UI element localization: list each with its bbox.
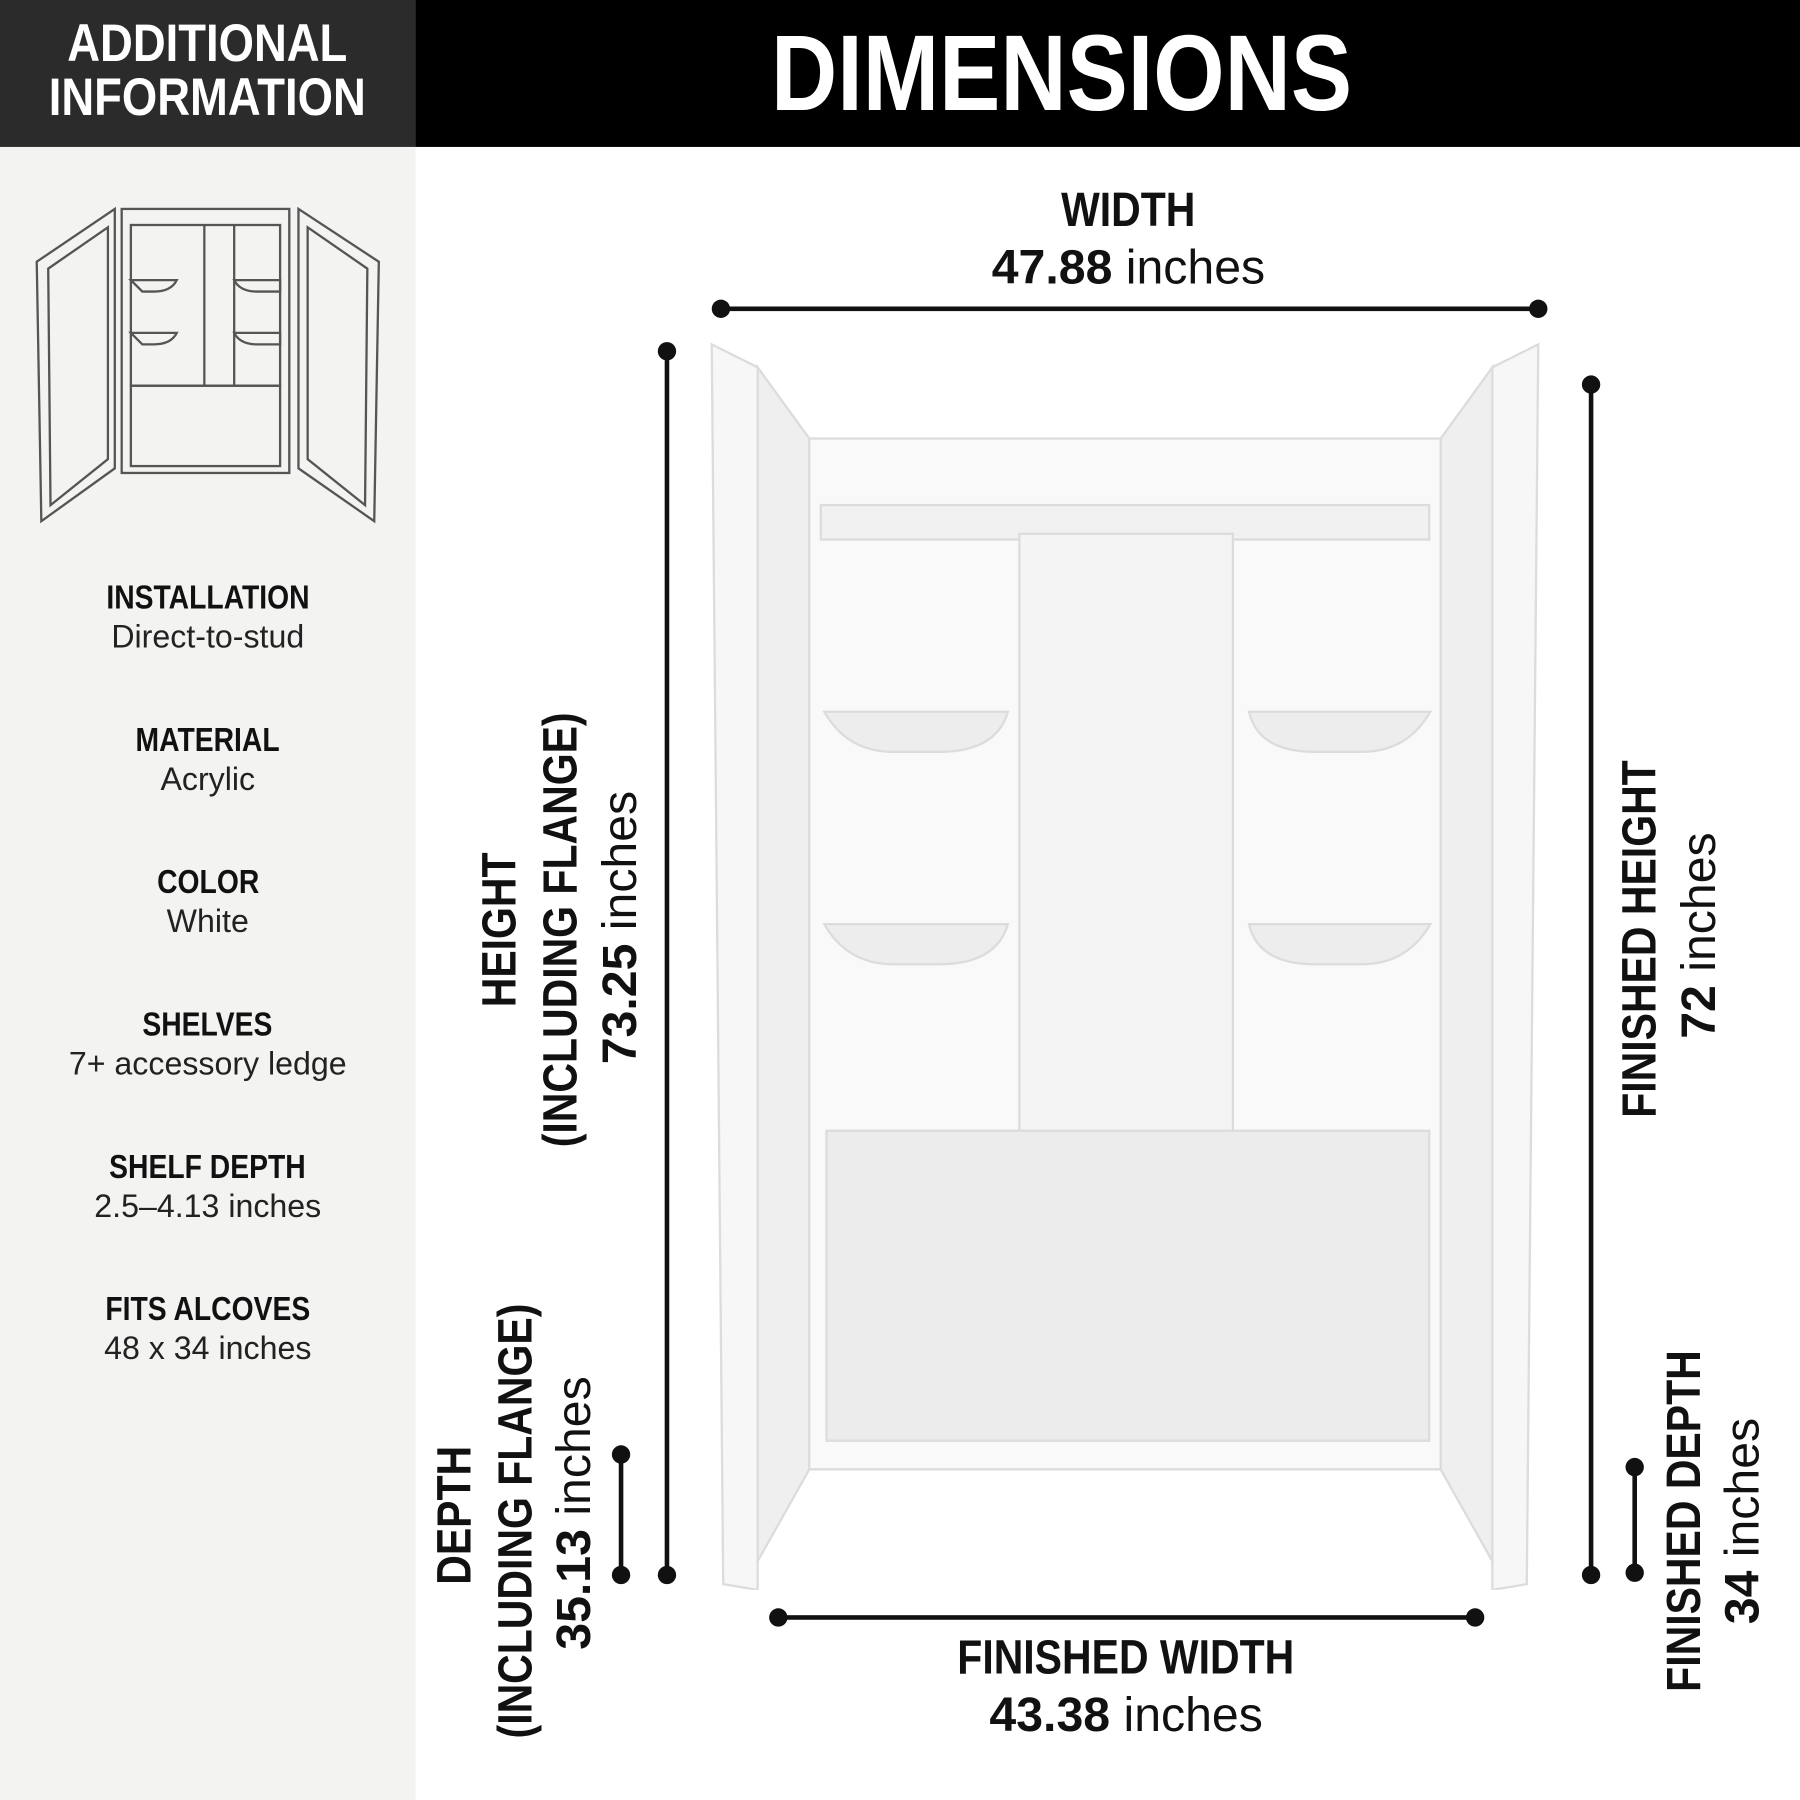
heading: additional information	[0, 0, 416, 147]
label: depth including flange: 35.13 inches	[546, 1376, 600, 1650]
label: height including flange: 73.25 inches	[592, 791, 646, 1064]
arrow: width line	[712, 300, 1548, 318]
text: color: COLOR	[157, 864, 259, 901]
label: finished depth: FINISHED DEPTH	[1657, 1350, 1710, 1692]
label: height including flange	[472, 712, 646, 1147]
text: material: Acrylic	[160, 761, 255, 797]
panel: additional information sidebar	[0, 0, 416, 1800]
heading: dimensions	[416, 0, 1800, 147]
text: shelf depth: SHELF DEPTH	[110, 1149, 306, 1186]
label: finished depth	[1657, 1350, 1769, 1692]
heading: additional information: INFORMATION	[49, 67, 366, 126]
text: shelves: SHELVES	[143, 1007, 273, 1043]
label: depth including flange: DEPTH	[427, 1446, 481, 1585]
label: finished height: 72 inches	[1671, 832, 1725, 1039]
heading: dimensions: DIMENSIONS	[771, 13, 1352, 133]
text: shelf depth	[94, 1149, 321, 1224]
label: finished width: FINISHED WIDTH	[958, 1630, 1295, 1684]
heading: additional information: ADDITIONAL	[68, 13, 348, 72]
label: width: 47.88 inches	[992, 240, 1265, 294]
arrow: height line	[658, 342, 676, 1584]
text: shelves	[69, 1007, 347, 1081]
arrow: finished depth line	[1626, 1458, 1644, 1582]
arrow: depth line	[612, 1445, 630, 1584]
label: finished depth: 34 inches	[1715, 1418, 1769, 1624]
text: fits alcoves	[104, 1291, 311, 1366]
arrow: finished height line	[1582, 375, 1600, 1584]
arrow: finished width line	[769, 1608, 1484, 1627]
label: finished width	[958, 1630, 1295, 1741]
label: finished height	[1612, 760, 1725, 1118]
illustration: shower wall surround	[710, 342, 1540, 1590]
label: finished height: FINISHED HEIGHT	[1612, 760, 1666, 1118]
text: shelf depth: 2.5–4.13 inches	[94, 1188, 321, 1224]
text: material	[136, 722, 280, 797]
label: width	[992, 183, 1265, 294]
label: depth including flange: (INCLUDING FLANGE)	[488, 1304, 542, 1738]
text: installation: INSTALLATION	[106, 580, 309, 616]
icon: shower surround sketch	[36, 206, 380, 524]
text: material: MATERIAL	[136, 722, 280, 759]
text: installation: Direct-to-stud	[111, 619, 304, 654]
text: color: White	[167, 903, 249, 939]
label: depth including flange	[427, 1304, 600, 1738]
label: height including flange: HEIGHT	[472, 852, 526, 1007]
label: finished width: 43.38 inches	[989, 1687, 1263, 1741]
label: height including flange: (INCLUDING FLANGE)	[533, 712, 587, 1147]
text: fits alcoves: FITS ALCOVES	[105, 1291, 310, 1328]
text: installation	[106, 580, 309, 654]
label: width: WIDTH	[1061, 183, 1196, 236]
text: shelves: 7+ accessory ledge	[69, 1046, 347, 1081]
text: color	[157, 864, 259, 939]
text: fits alcoves: 48 x 34 inches	[104, 1330, 311, 1366]
